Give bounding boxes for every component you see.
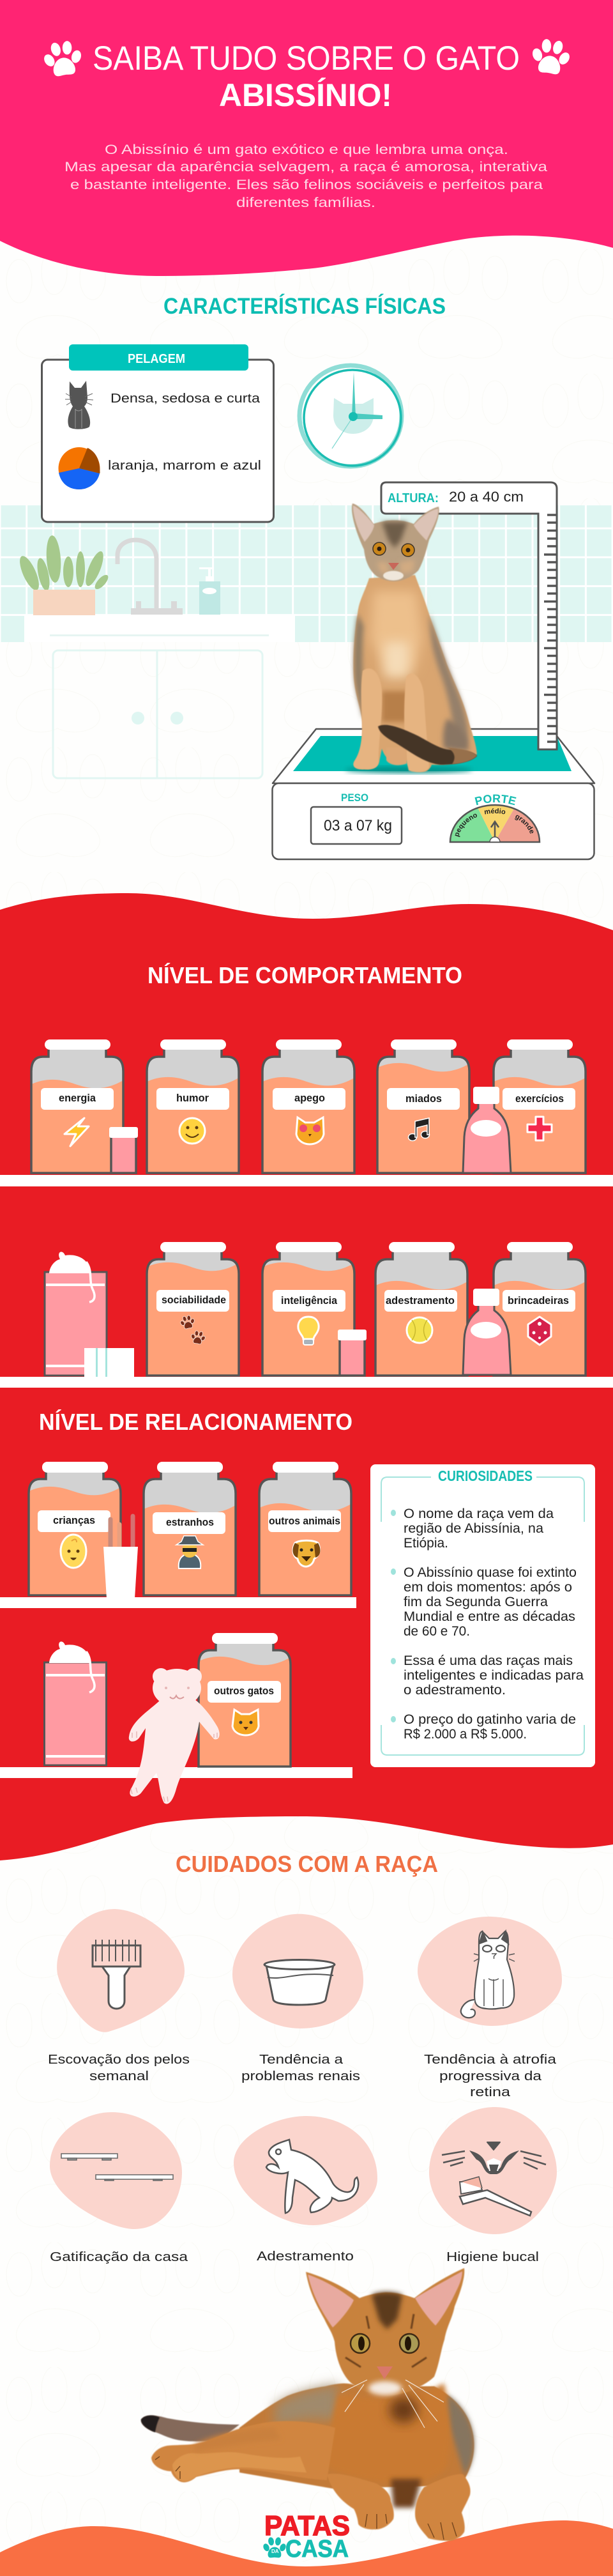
jar: apego	[261, 1039, 356, 1174]
heading: características físicas: CARACTERÍSTICAS FÍSICAS	[163, 293, 446, 319]
blob	[418, 1917, 562, 2026]
shelf 1	[0, 1175, 613, 1186]
icon: tennis ball	[407, 1317, 432, 1343]
icon: clock	[299, 365, 402, 466]
fact 1: região de Abissínia, na	[404, 1521, 543, 1536]
label: Adestramento	[257, 2250, 354, 2264]
tag: sociabilidade: sociabilidade	[162, 1294, 226, 1306]
jar: sociabilidade	[146, 1242, 240, 1377]
jar: inteligência	[261, 1242, 356, 1377]
tag: brincadeiras: brincadeiras	[508, 1294, 569, 1307]
fact 4	[391, 1712, 576, 1742]
cat photo: sitting on the scale	[345, 503, 477, 773]
fact 1	[391, 1506, 554, 1551]
tag: crianças: crianças	[53, 1514, 95, 1526]
nose and muzzle	[383, 571, 404, 580]
hind legs	[151, 2421, 335, 2482]
care item: renais: problemas renais	[241, 2069, 360, 2083]
toes	[155, 2457, 457, 2540]
icon: spy	[176, 1536, 203, 1568]
fact 2	[391, 1565, 577, 1639]
jar: humor	[146, 1039, 240, 1174]
wall tiles	[0, 505, 613, 642]
pink bottle	[463, 1087, 511, 1173]
height value: 20 a 40 cm	[449, 489, 524, 505]
cat photo: lying cat	[141, 2268, 474, 2541]
cabinet	[53, 650, 262, 778]
ruler	[381, 482, 557, 749]
tag: sociabilidade	[156, 1290, 229, 1312]
tag: energia: energia	[59, 1092, 96, 1104]
muzzle	[368, 2381, 402, 2395]
jar: outros animais	[258, 1462, 352, 1597]
icon: mouth and toothbrush	[442, 2142, 546, 2216]
cat head	[352, 503, 439, 581]
ears	[353, 505, 374, 542]
card tab label: PELAGEM	[128, 352, 185, 366]
card tab	[69, 344, 248, 371]
tag: exercícios: exercícios	[515, 1092, 564, 1105]
chest	[327, 2383, 450, 2483]
tag: humor	[156, 1088, 229, 1110]
tag: adestramento: adestramento	[386, 1294, 455, 1307]
fact 3: Essa é uma das raças mais	[404, 1653, 573, 1668]
fact 3: o adestramento.	[404, 1683, 506, 1698]
care item: escovação	[48, 1909, 190, 2083]
tag: outros animais	[268, 1510, 341, 1532]
intro paragraph: Mas apesar da aparência selvagem, a raça é amorosa, interativa	[64, 160, 547, 174]
tag: outros animais: outros animais	[269, 1515, 340, 1527]
forehead	[382, 522, 407, 548]
intro paragraph: diferentes famílias.	[236, 195, 375, 210]
care item: gatificação	[50, 2112, 188, 2264]
icon: cat with heart eyes	[296, 1117, 324, 1144]
fact 4: R$ 2.000 a R$ 5.000.	[404, 1727, 527, 1742]
icon: cat face	[232, 1710, 259, 1735]
fact 2: O Abissínio quase foi extinto	[404, 1565, 577, 1580]
eyes	[373, 542, 386, 555]
tag: inteligência	[273, 1290, 345, 1312]
tag: inteligência: inteligência	[281, 1294, 338, 1307]
icon: right paw	[528, 36, 573, 76]
tag: estranhos: estranhos	[166, 1516, 214, 1528]
weight value: 03 a 07 kg	[324, 817, 392, 834]
tail	[378, 725, 477, 765]
scale front	[272, 783, 594, 859]
icon: cat with raised paw	[266, 2140, 358, 2213]
tag: brincadeiras	[503, 1290, 575, 1312]
panel: red section	[0, 893, 613, 1860]
logo: DA	[271, 2549, 279, 2554]
cheeks	[377, 562, 390, 574]
jar: estranhos	[142, 1462, 237, 1597]
front legs	[327, 2474, 394, 2529]
height label: ALTURA:	[388, 491, 439, 505]
icon: bowl	[264, 1960, 335, 2005]
panel: curiosidades	[370, 1464, 595, 1767]
size gauge: médio	[484, 808, 506, 814]
label: Tendência a	[259, 2053, 344, 2067]
icon: dog	[293, 1540, 320, 1567]
pink bottle	[463, 1289, 511, 1375]
scale top	[273, 729, 594, 783]
counter	[24, 615, 295, 642]
fact 2: de 60 e 70.	[404, 1624, 470, 1639]
icon: paw prints	[179, 1314, 207, 1345]
care item: retina: progressiva da	[439, 2069, 542, 2083]
care item: adestramento	[234, 2116, 377, 2264]
logo: PATAS	[264, 2510, 350, 2542]
head	[306, 2268, 464, 2396]
label: Gatificação da casa	[50, 2250, 188, 2264]
icon: dice	[528, 1317, 551, 1345]
kitchen illustration	[0, 505, 613, 778]
fact 4: O preço do gatinho varia de	[404, 1712, 576, 1727]
care item: escovação: semanal	[89, 2069, 149, 2083]
tag: adestramento	[384, 1290, 457, 1312]
icon: light bulb	[298, 1317, 319, 1345]
small pink jar	[109, 1127, 138, 1173]
faucet	[117, 540, 156, 608]
tag: outros gatos	[208, 1681, 281, 1703]
care item: higiene	[429, 2107, 557, 2264]
small pink jar	[338, 1330, 367, 1376]
tag: apego: apego	[294, 1092, 325, 1104]
grey back	[275, 2384, 338, 2428]
colours text: laranja, marrom e azul	[108, 459, 261, 473]
card	[42, 360, 273, 522]
fact 3	[391, 1653, 584, 1698]
label: Escovação dos pelos	[48, 2053, 190, 2067]
glass with straws	[103, 1516, 138, 1598]
blob	[232, 1914, 363, 2028]
tag: miados	[387, 1088, 460, 1110]
heading: relacionamento: NÍVEL DE RELACIONAMENTO	[39, 1409, 352, 1435]
icon: music	[409, 1118, 429, 1141]
blob	[234, 2116, 377, 2225]
weight value box	[311, 807, 402, 844]
fact 3: inteligentes e indicadas para	[404, 1668, 584, 1683]
care item: retina	[418, 1917, 562, 2099]
tag: outros gatos: outros gatos	[214, 1685, 274, 1697]
coat text: Densa, sedosa e curta	[110, 392, 261, 406]
shelf 4	[0, 1767, 352, 1778]
size label: PORTE	[475, 795, 516, 805]
tag: apego	[273, 1088, 345, 1110]
cat body	[353, 575, 477, 772]
eyes	[351, 2334, 370, 2353]
icon: dark cat	[65, 381, 93, 429]
card title: CURIOSIDADES	[438, 1468, 533, 1484]
shaded back	[429, 613, 468, 747]
blob	[57, 1909, 185, 2032]
jar: miados	[376, 1039, 471, 1174]
tail	[141, 2416, 239, 2441]
teddy bear	[129, 1668, 220, 1804]
icon: smile	[179, 1118, 205, 1144]
jar: exercícios	[492, 1039, 587, 1174]
teal mat	[293, 736, 571, 771]
size gauge: pequeno	[455, 814, 477, 837]
care item: renais	[232, 1914, 363, 2083]
icon: brush	[93, 1940, 140, 2009]
fact 2: Mundial e entre as décadas	[404, 1609, 575, 1624]
fact 2: em dois momentos: após o	[404, 1580, 572, 1595]
label: Tendência à atrofia	[424, 2053, 557, 2067]
jar: brincadeiras	[492, 1242, 587, 1377]
fact 1: Etiópia.	[404, 1536, 448, 1551]
intro paragraph: e bastante inteligente. Eles são felinos sociáveis e perfeitos para	[70, 178, 543, 192]
tag: miados: miados	[405, 1092, 442, 1105]
fact 2: fim da Segunda Guerra	[404, 1595, 548, 1609]
card border	[381, 1477, 584, 1755]
chest highlight	[370, 591, 423, 671]
panel: scale and ruler	[271, 482, 595, 860]
heading: cuidados: CUIDADOS COM A RAÇA	[176, 1851, 438, 1877]
icon: left paw	[40, 38, 86, 78]
panel: header	[0, 0, 613, 276]
ruler base	[538, 729, 557, 749]
tag: exercícios	[503, 1088, 575, 1110]
face stripes	[345, 2314, 427, 2367]
tag: estranhos	[153, 1512, 225, 1534]
title line 2: ABISSÍNIO!	[219, 77, 392, 113]
intro paragraph: O Abissínio é um gato exótico e que lembra uma onça.	[105, 142, 508, 157]
size gauge	[450, 804, 540, 843]
weight label: PESO	[341, 792, 368, 804]
legs	[354, 668, 382, 769]
body	[239, 2383, 474, 2488]
forehead stripe	[372, 2292, 402, 2329]
blob	[50, 2112, 182, 2229]
shelf 3	[0, 1597, 356, 1608]
rack: pink box with mouse	[45, 1641, 106, 1765]
icon: plus	[527, 1117, 552, 1140]
logo: CASA	[285, 2536, 349, 2563]
tag: humor: humor	[176, 1092, 209, 1104]
ears	[308, 2274, 354, 2327]
blob	[429, 2107, 557, 2234]
jar: crianças	[27, 1462, 122, 1597]
tag: energia	[41, 1088, 114, 1110]
soap bottle	[199, 581, 220, 615]
icon: colour pie	[59, 447, 100, 489]
ruler ticks	[544, 515, 557, 726]
icon: lightning	[64, 1118, 89, 1146]
title line 1: SAIBA TUDO SOBRE O GATO	[93, 40, 520, 77]
shelf 2	[0, 1377, 613, 1388]
jar: outros gatos	[197, 1633, 292, 1768]
label: Higiene bucal	[446, 2250, 539, 2264]
logo	[262, 2510, 350, 2563]
tag: crianças	[38, 1510, 110, 1532]
plant	[16, 535, 110, 615]
panel: pelagem	[42, 344, 273, 522]
header background wave	[0, 0, 613, 276]
size gauge: grande	[515, 815, 534, 834]
red background wave	[0, 893, 613, 1860]
card	[370, 1464, 595, 1767]
jar: energia	[30, 1039, 125, 1174]
care item: retina: retina	[470, 2085, 511, 2099]
icon: white cat	[461, 1931, 515, 2018]
fact 1: O nome da raça vem da	[404, 1506, 554, 1521]
bottom orange wave	[0, 2520, 613, 2576]
heading: comportamento: NÍVEL DE COMPORTAMENTO	[148, 962, 462, 988]
jar: adestramento	[374, 1242, 469, 1377]
intro paragraph	[64, 142, 547, 210]
icon: baby	[61, 1535, 86, 1568]
icon: wall shelves	[61, 2154, 173, 2181]
rack: pink box with mouse	[45, 1252, 134, 1377]
